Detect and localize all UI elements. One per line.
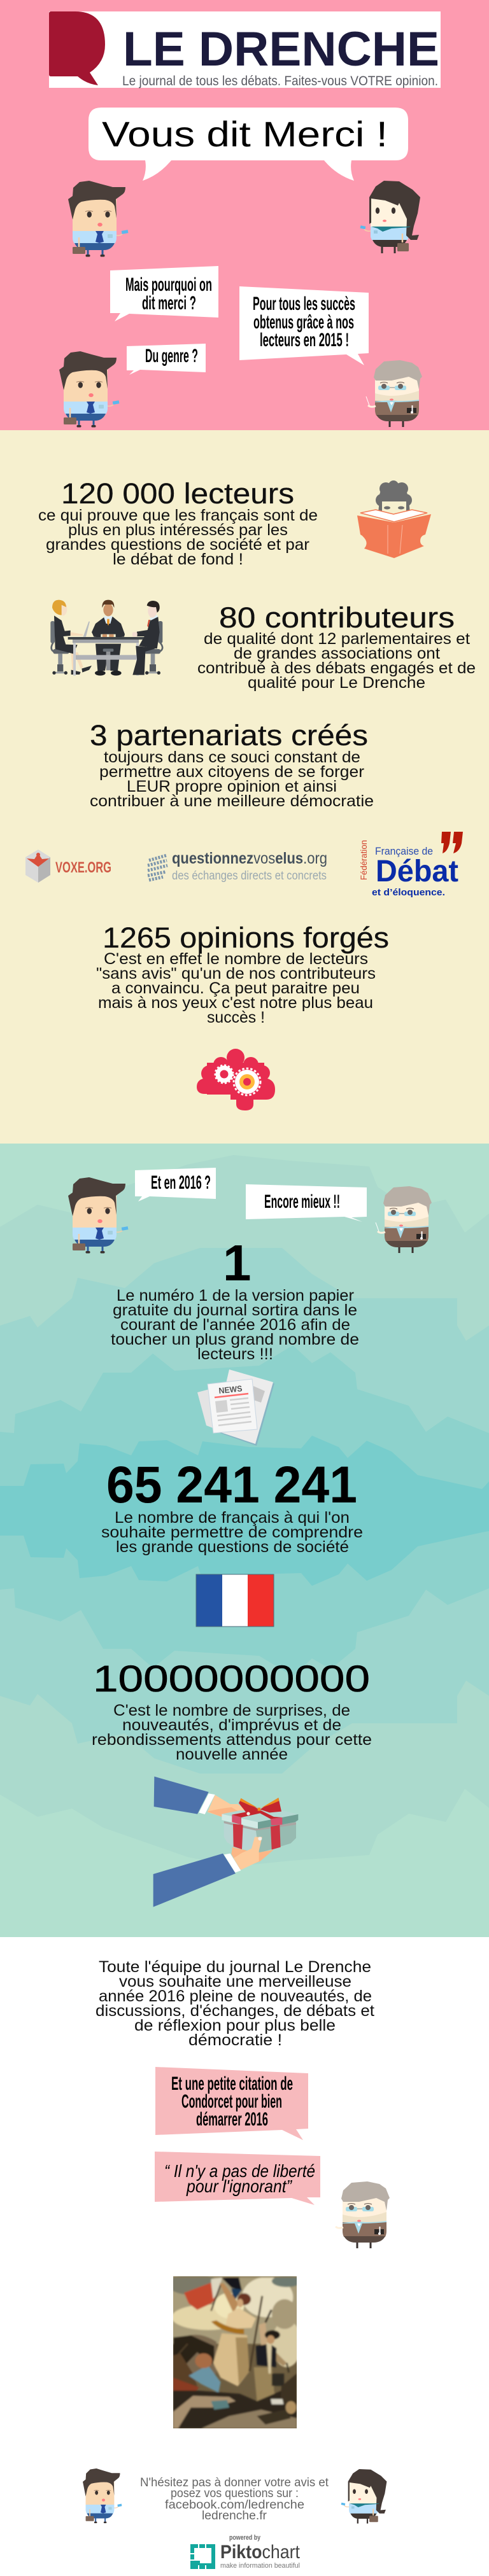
character: woman right	[360, 181, 420, 253]
stat: 80 contributeurs: 80 contributeurs	[219, 601, 455, 634]
speech bubble: Mais pourquoi: dit merci ?	[142, 293, 196, 314]
icon: reader with book	[357, 480, 431, 558]
speech bubble: Encore mieux	[246, 1184, 367, 1222]
character: woman footer	[341, 2469, 386, 2524]
logo: federation francaise de debat	[358, 832, 463, 898]
stat: 3 partenariats: toujours dans ce souci constant de	[104, 748, 360, 766]
stat: 80 contributeurs: de qualité dont 12 parlementaires et	[204, 630, 470, 648]
logo: voxe.org	[25, 850, 111, 883]
icon: brain with gears	[197, 1049, 275, 1110]
speech bubble: Pour tous les succes: lecteurs en 2015 !	[260, 330, 349, 351]
character: old man 2016	[376, 1186, 432, 1253]
contact text: N'hésitez pas à donner votre avis et	[140, 2476, 329, 2489]
powered by Piktochart	[190, 2534, 301, 2570]
painting: Liberty leading the people	[173, 2276, 297, 2428]
section: cream background	[0, 430, 489, 1144]
stat: 120 000 lecteurs: ce qui prouve que les français sont de	[38, 507, 318, 524]
speech bubble: quotation: pour l'ignorant”	[186, 2176, 292, 2196]
stat: 10000000000: nouveautés, d'imprévus et de	[122, 1716, 341, 1734]
closing message	[96, 1958, 374, 2049]
closing message: démocratie !	[188, 2031, 282, 2049]
stat: 1265 opinions: "sans avis" qu'un de nos contributeurs	[96, 965, 376, 983]
stat: numero 1	[111, 1235, 359, 1363]
closing message: vous souhaite une merveilleuse	[119, 1973, 351, 1991]
stat: 120 000 lecteurs: grandes questions de société et par	[46, 536, 309, 554]
stat: 80 contributeurs: qualité pour Le Drenche	[248, 674, 425, 692]
logo: Le Drenche: LE DRENCHE	[123, 22, 439, 76]
stat: 1265 opinions: succès !	[207, 1009, 265, 1026]
closing message: Toute l'équipe du journal Le Drenche	[99, 1958, 371, 1976]
stat: numero 1: courant de l'année 2016 afin de	[120, 1316, 350, 1334]
contact text	[140, 2476, 329, 2523]
contact text: facebook.com/ledrenche	[165, 2498, 304, 2512]
powered by Piktochart: powered by	[229, 2534, 261, 2542]
speech bubble: Et en 2016	[135, 1168, 216, 1201]
stat: 65 241 241: Le nombre de français à qui l'on	[115, 1509, 350, 1527]
stat: 65 241 241	[101, 1456, 363, 1556]
speech bubble: Pour tous les succes: obtenus grâce à nos	[253, 312, 354, 333]
speech bubble: Pour tous les succes: Pour tous les succès	[253, 293, 355, 314]
character: man footer	[83, 2468, 122, 2523]
stat: 3 partenariats: permettre aux citoyens de se forger	[99, 763, 364, 781]
stat: 10000000000: 10000000000	[93, 1658, 370, 1700]
stat: 3 partenariats: LEUR propre opinion et ainsi	[127, 778, 337, 795]
powered by Piktochart: make information beautiful	[220, 2562, 300, 2570]
speech bubble: Du genre: Du genre ?	[145, 346, 198, 367]
speech bubble: quotation: “ Il n'y a pas de liberté	[164, 2161, 315, 2181]
icon: newspaper	[197, 1369, 274, 1446]
stat: 1265 opinions	[96, 921, 389, 1026]
speech bubble: Du genre	[127, 344, 206, 375]
contact text: ledrenche.fr	[202, 2509, 267, 2523]
speech bubble: citation de Condorcet	[155, 2067, 308, 2140]
speech bubble: citation de Condorcet: démarrer 2016	[196, 2109, 268, 2130]
stat: 1265 opinions: a convaincu. Ça peut paraitre peu	[111, 979, 360, 997]
stat: 80 contributeurs: contribué à des débats engagés et de	[197, 659, 476, 677]
stat: 1265 opinions: mais à nos yeux c'est notre plus beau	[98, 994, 373, 1012]
stat: numero 1: toucher un plus grand nombre de	[111, 1331, 359, 1348]
icon: french flag	[196, 1574, 274, 1627]
icon: hands giving a gift	[153, 1777, 298, 1907]
section: white closing background	[0, 1937, 489, 2576]
section: teal background	[0, 1144, 489, 1937]
stat: 3 partenariats: 3 partenariats créés	[90, 719, 368, 752]
title bubble: Vous dit Merci	[89, 108, 408, 181]
logo: Le Drenche: Le journal de tous les débats. Faites-vous VOTRE opinion.	[122, 74, 438, 88]
stat: numero 1: lecteurs !!!	[197, 1345, 273, 1363]
stat: 65 241 241: souhaite permettre de comprendre	[101, 1523, 363, 1541]
speech bubble: citation de Condorcet: Et une petite citation de	[171, 2073, 293, 2094]
logo: federation francaise de debat: et d’éloquence.	[372, 887, 445, 898]
stat: 10000000000: nouvelle année	[176, 1746, 288, 1763]
stat: 120 000 lecteurs: 120 000 lecteurs	[61, 477, 294, 510]
stat: numero 1: gratuite du journal sortira dans le	[113, 1301, 357, 1319]
icon: meeting of three people	[50, 600, 162, 676]
stat: 120 000 lecteurs: le débat de fond !	[113, 550, 243, 568]
speech bubble: Pour tous les succes	[239, 286, 369, 365]
stat: 120 000 lecteurs	[38, 477, 318, 568]
logo: Le Drenche	[49, 11, 441, 88]
speech bubble: citation de Condorcet: Condorcet pour bien	[181, 2091, 282, 2112]
logo: questionnezvoselus.org	[148, 850, 327, 883]
speech bubble: Et en 2016: Et en 2016 ?	[151, 1172, 211, 1193]
stat: 3 partenariats: contribuer à une meilleure démocratie	[90, 792, 374, 810]
stat: numero 1: 1	[223, 1235, 251, 1291]
closing message: de réflexion pour plus belle	[134, 2017, 336, 2034]
logo: questionnezvoselus.org: des échanges directs et concrets	[172, 869, 327, 883]
section: pink header background	[0, 0, 489, 430]
closing message: année 2016 pleine de nouveautés, de	[99, 1987, 372, 2005]
speech bubble: Mais pourquoi	[110, 266, 218, 321]
character: old man quoting	[334, 2181, 390, 2248]
stat: 10000000000	[92, 1658, 372, 1763]
closing message: discussions, d'échanges, de débats et	[96, 2002, 374, 2020]
logo: federation francaise de debat: Débat	[376, 855, 458, 888]
stat: 120 000 lecteurs: plus en plus intéressés par les	[68, 521, 288, 539]
logo: federation francaise de debat: Française de	[375, 845, 433, 857]
contact text: posez vos questions sur :	[171, 2487, 299, 2500]
stat: 10000000000: C'est le nombre de surprises, de	[113, 1702, 350, 1719]
speech bubble: quotation	[155, 2152, 320, 2205]
logo: voxe.org: VOXE.ORG	[55, 859, 111, 876]
character: man left	[68, 181, 128, 257]
powered by Piktochart: Piktochart	[220, 2542, 301, 2563]
stat: 1265 opinions: 1265 opinions forgés	[103, 921, 389, 954]
logo: federation francaise de debat: Fédération	[358, 840, 369, 880]
stat: numero 1: Le numéro 1 de la version papier	[117, 1287, 354, 1305]
character: man 2016	[68, 1177, 128, 1254]
stat: 1265 opinions: C'est en effet le nombre de lecteurs	[104, 950, 368, 968]
character: old man	[366, 360, 422, 427]
speech bubble: Mais pourquoi: Mais pourquoi on	[125, 274, 212, 295]
stat: 80 contributeurs	[197, 601, 476, 692]
speech bubble: Encore mieux: Encore mieux !!	[264, 1191, 340, 1212]
stat: 3 partenariats	[90, 719, 374, 810]
icon: newspaper: NEWS	[218, 1383, 243, 1396]
stat: 10000000000: rebondissements attendus pour cette	[92, 1731, 372, 1749]
character: man lower	[59, 351, 119, 428]
logo: questionnezvoselus.org: questionnezvoselus.org	[172, 850, 327, 867]
title bubble: Vous dit Merci: Vous dit Merci !	[102, 114, 388, 154]
stat: 80 contributeurs: de grandes associations ont	[234, 645, 440, 662]
stat: 65 241 241: 65 241 241	[106, 1456, 357, 1514]
stat: 65 241 241: les grande questions de société	[116, 1538, 349, 1556]
